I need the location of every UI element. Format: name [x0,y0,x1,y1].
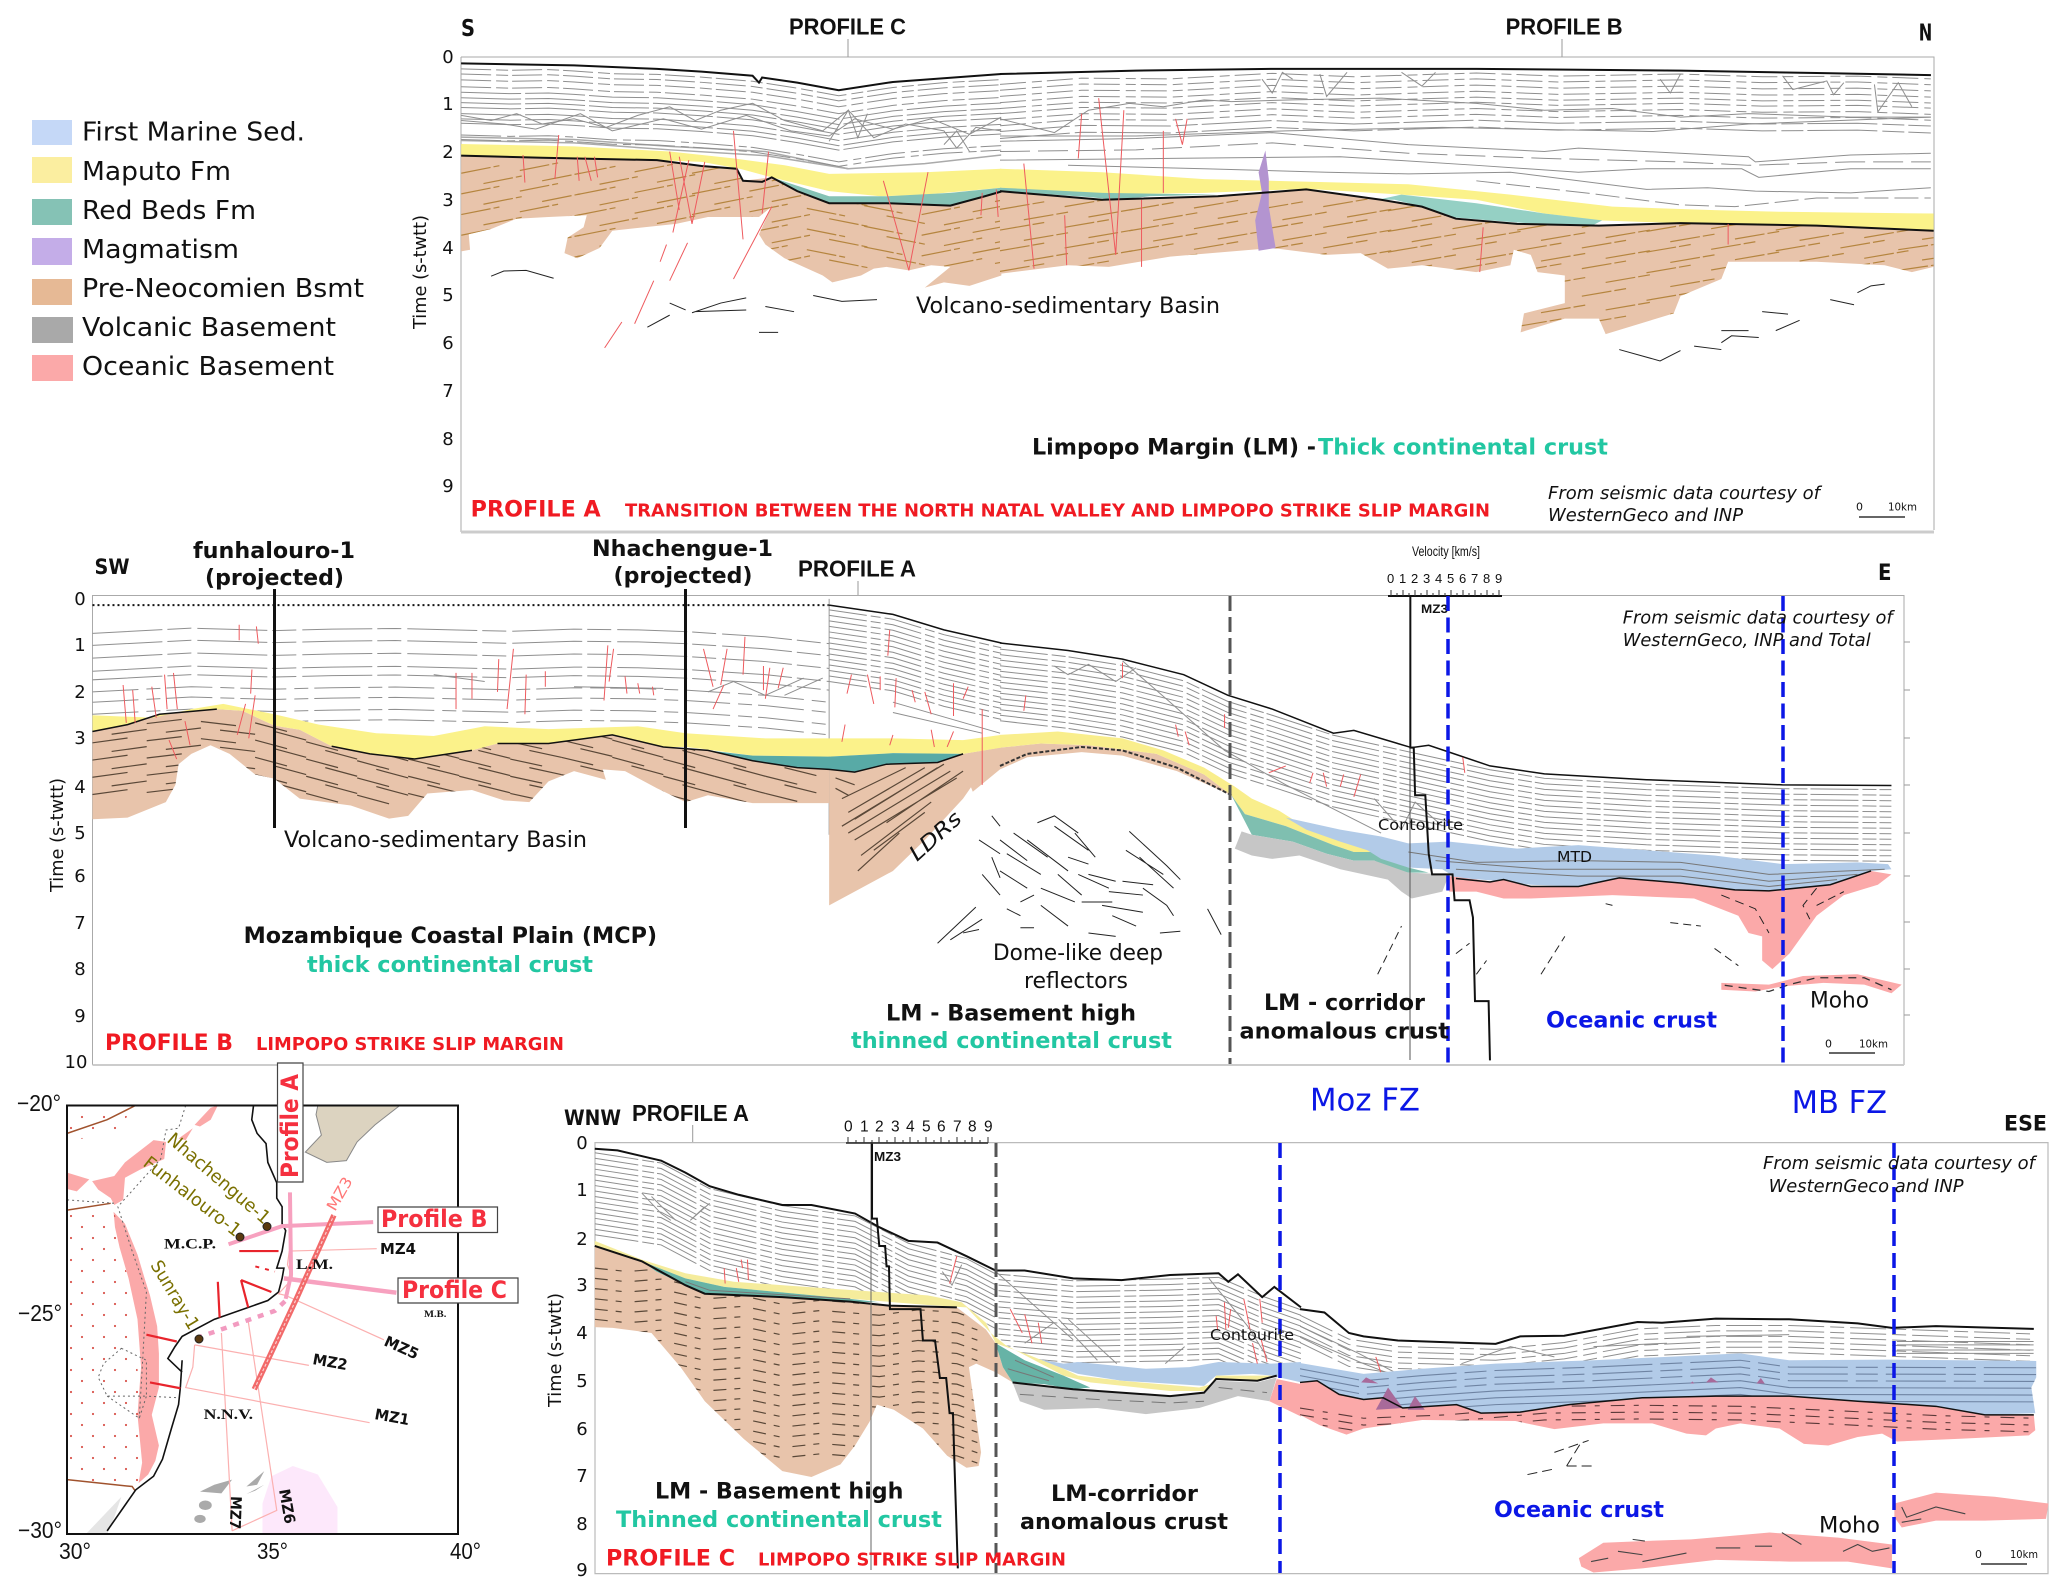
map region labels: L.M. [296,1257,333,1273]
data credit C [1763,1153,2038,1197]
frame and time axis B: 1 [74,635,86,656]
heading labels A [461,14,1932,47]
scale bar C: 0 [1975,1548,1982,1561]
frame and time axis B: 7 [74,913,86,934]
domain title A: Thick continental crust [1318,436,1608,460]
legend item: Pre-Neocomien Bsmt: Pre-Neocomien Bsmt [82,274,364,304]
seismic horizons left half A [461,69,1001,169]
Maputo formation fills B [92,704,1374,852]
seafloor and basement horizons A [461,63,1934,231]
map region labels: N.N.V. [204,1407,253,1423]
panel: location map [17,1063,518,1564]
legend item: Oceanic Basement: Oceanic Basement [82,352,334,382]
frame and time axis A: 0 [442,47,454,68]
well line and velocity log C [871,1142,958,1570]
frame and time axis A: 2 [442,142,454,163]
MZ line labels: MZ1 [373,1405,411,1429]
scale bar B: 10km [1859,1038,1888,1051]
profile A title: PROFILE A [471,498,601,522]
pre-Neocomian basement fill C [595,1246,1013,1477]
frame and time axis A: 6 [442,333,454,354]
label: dome-like deep reflectors [993,941,1163,994]
heading labels A: S [461,16,475,42]
labels top B: SW [94,555,130,579]
label: Volcano-sedimentary Basin A: Volcano-sedimentary Basin [916,294,1220,319]
frame and time axis B: 3 [74,728,86,749]
faults and deep reflectors C [724,1256,1594,1475]
legend item: Volcanic Basement: Volcanic Basement [82,313,336,343]
frame and time axis B: 0 [74,589,86,610]
domain title basement high B: LM - Basement high [886,1002,1136,1027]
legend item: Maputo Fm: Maputo Fm [82,157,231,187]
magmatism intrusion A [1255,151,1276,251]
domain title corridor C [1020,1482,1228,1535]
velocity axis B: 0123456789 [1387,571,1502,586]
oceanic basement fill B [1449,871,1891,969]
frame and time axis A: 1 [442,94,454,115]
Red Beds fill A [772,177,1602,226]
pink basement and land [67,1105,400,1534]
map axis labels: −30° [18,1517,62,1543]
Moho fills C [1579,1493,2048,1572]
domain title corridor B: LM - corridor [1264,991,1425,1016]
domain title basement high C [616,1480,942,1533]
label: MB FZ: MB FZ [1792,1085,1887,1121]
map background features [67,1105,400,1534]
faults B [123,625,1465,797]
frame and time axis C: 0 [576,1133,588,1154]
heading labels A: PROFILE C [789,14,906,40]
Maputo and red beds fills C [595,1241,1272,1391]
MZ line labels: MZ5 [381,1332,422,1363]
frame and time axis C: 5 [576,1371,588,1392]
frame and time axis C: 3 [576,1275,588,1296]
label: Volcano-sedimentary Basin B: Volcano-sedimentary Basin [284,828,587,853]
map callout: Profile C: Profile C [402,1276,507,1304]
data credit A: WesternGeco and INP [1548,505,1743,526]
heading labels C: ESE [2004,1112,2047,1136]
seismic horizons B [92,599,1891,861]
map region labels: M.B. [424,1309,446,1319]
brown boundaries and coastline [67,1105,286,1531]
map axis labels: 30° [59,1538,91,1564]
profile B title: PROFILE B [105,1031,233,1056]
frame and time axis A: 5 [442,285,454,306]
frame and time axis A: Time (s-twtt) [410,215,431,330]
map axis labels: −25° [18,1300,62,1326]
labels top B: (projected) [614,564,752,589]
fracture zone and domain dashed lines B [1230,596,1783,1064]
heading labels C: WNW [564,1106,621,1130]
domain title basement high C: LM - Basement high [655,1480,904,1504]
red beds fills B [708,750,1429,873]
first marine sediment fill B [1286,818,1891,891]
MZ line labels: MZ7 [226,1496,245,1529]
domain title corridor C: LM-corridor [1051,1482,1198,1507]
label: Contourite B: Contourite [1378,816,1463,834]
domain title corridor B [1240,991,1449,1045]
data credit B: From seismic data courtesy of [1623,608,1895,629]
scale bar C: 10km [2010,1548,2038,1561]
label: Contourite C: Contourite [1210,1326,1294,1344]
frame and time axis B: 2 [74,682,86,703]
domain title MCP [244,924,657,978]
legend item: First Marine Sed.: First Marine Sed. [82,118,305,148]
frame and time axis C: 9 [576,1560,588,1581]
map axis labels: −20° [17,1090,61,1116]
profile B title [105,1031,564,1056]
frame and time axis A: 8 [442,429,454,450]
frame and time axis A: 7 [442,381,454,402]
label: dome-like deep reflectors: Dome-like deep [993,941,1163,966]
volcanic basement fill B [1235,831,1449,899]
heading labels A: N [1919,21,1932,47]
labels top B: PROFILE A [798,556,916,582]
frame and time axis C: Time (s-twtt) [545,1293,566,1408]
domain title MCP: thick continental crust [307,953,593,978]
data credit A [1548,483,1823,526]
label: LDRs: LDRs [904,806,966,866]
domain title corridor B: anomalous crust [1240,1020,1449,1045]
scale bar A [1856,501,1917,517]
heading labels C [564,1100,2047,1136]
frame and time axis B: 9 [74,1006,86,1027]
first marine sediment fill C [1034,1353,2036,1415]
seafloor and basement horizons B [92,605,1891,795]
MZ line labels: MZ6 [275,1488,299,1525]
frame and time axis A [410,39,1934,532]
dome-like deep reflectors B [938,816,1844,974]
data credit C: From seismic data courtesy of [1763,1153,2038,1174]
panel: profile C seismic section [545,1082,2048,1581]
map profiles and lines [146,1192,396,1531]
velocity axis C [844,1119,993,1164]
frame and time axis C [545,1125,2048,1581]
MZ line labels: MZ3 [323,1174,356,1214]
scale bar A: 10km [1888,501,1917,514]
domain title corridor C: anomalous crust [1020,1510,1228,1535]
scale bar B: 0 [1825,1038,1832,1051]
heading labels C: PROFILE A [632,1100,749,1126]
label: Moho C: Moho [1819,1514,1880,1539]
profile B title: LIMPOPO STRIKE SLIP MARGIN [256,1034,564,1055]
MZ line labels [226,1174,422,1529]
MZ line labels: MZ2 [311,1350,349,1374]
domain title A [1032,436,1608,460]
oceanic basement fill C [1269,1379,2035,1446]
domain title basement high B [851,1002,1172,1054]
frame and time axis C: 7 [576,1466,588,1487]
velocity axis C: 0123456789 [844,1119,993,1136]
well labels: Nhachengue-1 [163,1129,274,1229]
label: dome-like deep reflectors: reflectors [1024,969,1128,994]
volcanic basement fill C [1013,1377,1277,1414]
seafloor and basement horizons C [595,1149,2034,1415]
domain title basement high B: thinned continental crust [851,1029,1172,1054]
frame and time axis B: 8 [74,959,86,980]
well lines and velocity log B [274,589,1490,1060]
well labels [139,1129,274,1334]
dotted basin area [68,1108,145,1490]
legend item: Magmatism: Magmatism [82,235,239,265]
basement fills B [92,709,1231,905]
domain title oceanic crust C: Oceanic crust [1494,1498,1664,1523]
data credit B: WesternGeco, INP and Total [1623,630,1871,651]
labels top B: E [1878,561,1892,586]
domain title oceanic crust B: Oceanic crust [1546,1009,1717,1034]
labels top B: (projected) [205,566,344,591]
map callout: Profile B: Profile B [381,1205,488,1233]
frame and time axis C: 6 [576,1419,588,1440]
velocity axis B: MZ3 [1421,602,1448,616]
seismic horizons C [595,1153,2034,1392]
map region labels [164,1237,446,1423]
data credit B [1623,608,1895,651]
scale bar C [1975,1548,2038,1564]
labels top B: Nhachengue-1 [592,537,773,562]
map region labels: M.C.P. [164,1237,216,1253]
wells [195,1222,271,1343]
data credit A: From seismic data courtesy of [1548,483,1823,504]
frame and time axis B [47,581,1910,1073]
panel: profile A seismic section [410,14,1957,532]
velocity axis C: MZ3 [874,1150,901,1164]
map axis labels: 40° [450,1538,481,1564]
frame and time axis C: 1 [576,1180,588,1201]
legend item: Red Beds Fm: Red Beds Fm [82,196,256,226]
frame and time axis A: 3 [442,190,454,211]
profile C title: PROFILE C [606,1547,735,1572]
label: MTD: MTD [1557,848,1592,866]
frame and time axis B: 5 [74,823,86,844]
profile C title: LIMPOPO STRIKE SLIP MARGIN [758,1550,1066,1571]
seismic horizons right half A [1000,72,1931,207]
magmatic edifices C [1361,1377,1765,1410]
frame and time axis B: 4 [74,777,86,798]
MZ line labels: MZ4 [380,1240,416,1258]
label: Moho B: Moho [1810,989,1869,1014]
frame and time axis B: 6 [74,866,86,887]
faults A [523,98,1728,348]
panel: profile B seismic section [47,537,1910,1073]
frame and time axis A: 9 [442,476,454,497]
velocity axis B [1387,543,1502,616]
frame and time axis B: Time (s-twtt) [47,778,68,893]
heading labels A: PROFILE B [1506,14,1623,40]
data credit C: WesternGeco and INP [1769,1176,1964,1197]
well labels: Sunray-1 [146,1257,203,1334]
scale bar B [1825,1038,1888,1053]
frame and time axis C: 2 [576,1229,588,1250]
labels top B [94,537,1892,591]
Maputo formation fill A [461,144,1934,231]
profile A title: TRANSITION BETWEEN THE NORTH NATAL VALLEY AND LIMPOPO STRIKE SLIP MARGIN [625,500,1490,522]
profile C title [606,1547,1066,1572]
labels top B: funhalouro-1 [193,539,355,564]
frame and time axis C: 4 [576,1323,588,1344]
domain title A: Limpopo Margin (LM) - [1032,436,1316,460]
map frame [67,1106,458,1534]
domain title MCP: Mozambique Coastal Plain (MCP) [244,924,657,949]
domain title basement high C: Thinned continental crust [616,1508,942,1533]
well labels: Funhalouro-1 [139,1152,245,1241]
Moho fill B [1721,974,1902,993]
pre-Neocomian basement fill A [461,156,1957,334]
legend [32,118,364,382]
label: Moz FZ: Moz FZ [1310,1082,1420,1118]
frame and time axis B: 10 [65,1052,87,1073]
frame and time axis C: 8 [576,1514,588,1535]
map axis labels: 35° [257,1538,288,1564]
frame and time axis A: 4 [442,238,454,259]
map axis labels [17,1090,481,1564]
map callout: Profile A: Profile A [276,1074,304,1178]
scale bar A: 0 [1856,501,1863,514]
fracture zone and domain dashed lines C [996,1143,1894,1573]
deep reflectors A [491,270,1885,361]
velocity axis B: Velocity [km/s] [1412,543,1480,559]
